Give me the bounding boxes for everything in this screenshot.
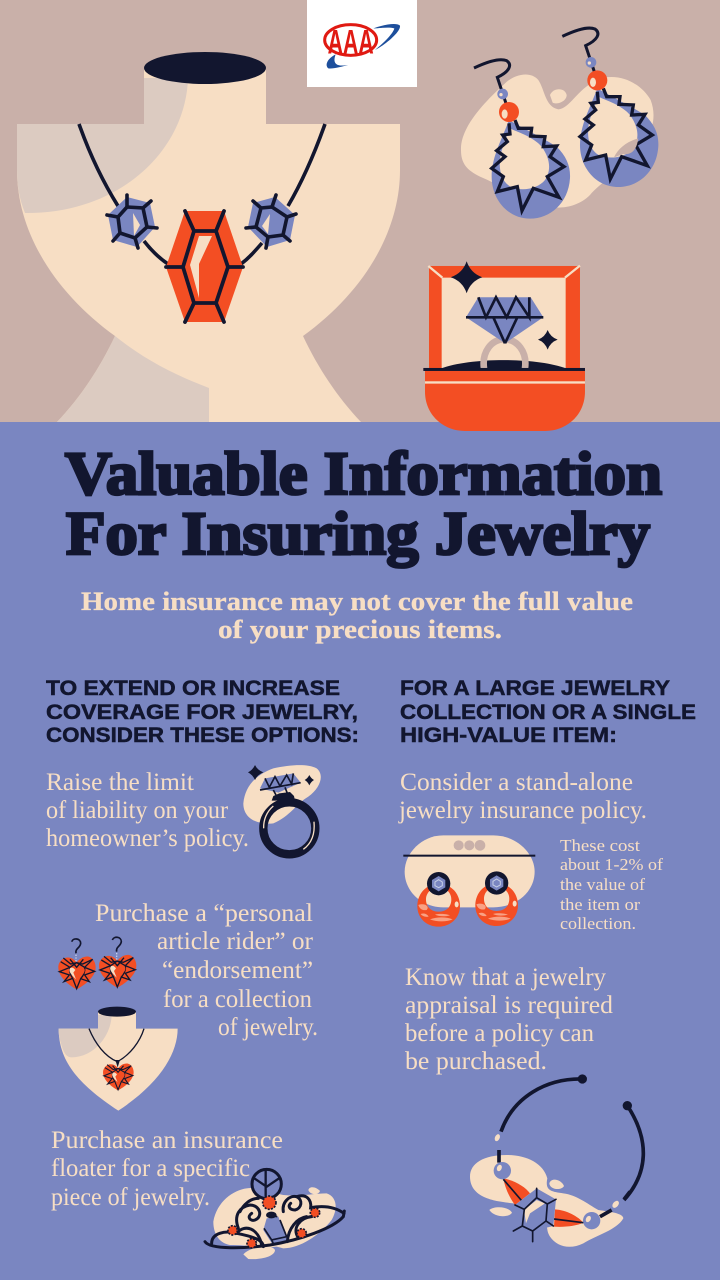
text: cost note: collection. — [560, 914, 636, 933]
left earring — [474, 60, 570, 219]
heading: right column: FOR A LARGE JEWELRY — [400, 677, 670, 700]
heading: right column — [400, 677, 696, 747]
title: Valuable Information — [65, 441, 662, 508]
heading: left column — [46, 677, 359, 747]
illustration: jewelry bust with necklace — [17, 52, 400, 422]
heading: left column: TO EXTEND OR INCREASE — [46, 677, 340, 700]
heading: right column: HIGH-VALUE ITEM: — [400, 724, 617, 747]
text: insurance floater — [51, 1127, 283, 1211]
earring backdrop blob — [461, 74, 654, 208]
diamond — [466, 297, 543, 343]
logo: AAA — [307, 0, 417, 87]
icon: tiara — [205, 1169, 344, 1259]
icon: diamond ring — [243, 765, 321, 854]
text: raise the limit: Raise the limit — [46, 769, 194, 796]
logo: AAA: AAA — [328, 24, 374, 62]
right heart earring — [99, 937, 136, 988]
text: raise the limit: of liability on your — [46, 797, 229, 824]
text: cost note: the item or — [560, 895, 641, 914]
text: know appraisal: be purchased. — [405, 1048, 547, 1075]
bracelet chain — [494, 1074, 643, 1200]
text: personal article rider — [95, 900, 318, 1041]
cushion — [441, 360, 567, 369]
ring band — [484, 339, 525, 368]
text: stand-alone policy: Consider a stand-alone — [400, 769, 633, 796]
left heart earring — [58, 939, 96, 989]
left hoop and stud — [417, 872, 460, 927]
red pendant gem — [166, 211, 243, 322]
text: know appraisal: Know that a jewelry — [405, 964, 606, 991]
box lid — [429, 266, 580, 371]
sparkle small — [538, 330, 558, 350]
illustration: ring in open box — [423, 261, 585, 431]
text: insurance floater: Purchase an insurance — [51, 1127, 283, 1154]
heading: left column: COVERAGE FOR JEWELRY, — [46, 701, 358, 724]
text: stand-alone policy — [398, 769, 647, 824]
lower shadow — [57, 336, 209, 422]
panel: lower information background — [0, 422, 720, 1280]
bust shape — [17, 68, 400, 422]
necklace chain — [79, 124, 325, 264]
box base — [425, 371, 585, 431]
illustration: pair of drop earrings — [461, 28, 658, 219]
text: personal article rider: Purchase a “personal — [95, 900, 313, 927]
right earring — [562, 28, 658, 187]
text: know appraisal: before a policy can — [405, 1020, 594, 1047]
text: personal article rider: of jewelry. — [218, 1014, 318, 1041]
blue side gem left — [107, 195, 157, 248]
icon: heart earrings — [58, 937, 136, 989]
text: raise the limit: homeowner’s policy. — [46, 825, 249, 852]
text: know appraisal: appraisal is required — [405, 992, 614, 1019]
subtitle: of your precious items. — [218, 614, 502, 644]
neck opening — [144, 52, 266, 84]
text: insurance floater: piece of jewelry. — [51, 1184, 210, 1211]
text: cost note: the value of — [560, 875, 646, 894]
text: personal article rider: “endorsement” — [162, 957, 313, 984]
title — [65, 441, 662, 568]
title: For Insuring Jewelry — [66, 501, 650, 568]
text: cost note: about 1-2% of — [560, 855, 664, 874]
blue side gem right — [246, 195, 296, 248]
icon: bracelet with gem — [470, 1074, 643, 1247]
subtitle: Home insurance may not cover the full value — [81, 586, 633, 616]
heading: right column: COLLECTION OR A SINGLE — [400, 701, 696, 724]
text: raise the limit — [46, 769, 249, 852]
icon: small bust with heart pendant — [59, 1007, 178, 1111]
text: insurance floater: floater for a specific — [51, 1155, 250, 1182]
shoulder shadow — [17, 78, 188, 213]
heading: left column: CONSIDER THESE OPTIONS: — [46, 724, 359, 747]
text: personal article rider: for a collection — [163, 986, 312, 1013]
text: stand-alone policy: jewelry insurance policy. — [398, 797, 647, 824]
panel: top illustration background — [0, 0, 720, 422]
text: cost note — [560, 836, 664, 933]
icon: stud and hoop earrings — [403, 835, 535, 927]
text: cost note: These cost — [560, 836, 640, 855]
sparkle large — [451, 261, 482, 293]
right hoop and stud — [475, 871, 518, 926]
text: know appraisal — [405, 964, 614, 1075]
bracelet charms — [470, 1150, 630, 1247]
text: personal article rider: article rider” or — [157, 928, 314, 955]
subtitle — [81, 586, 633, 644]
